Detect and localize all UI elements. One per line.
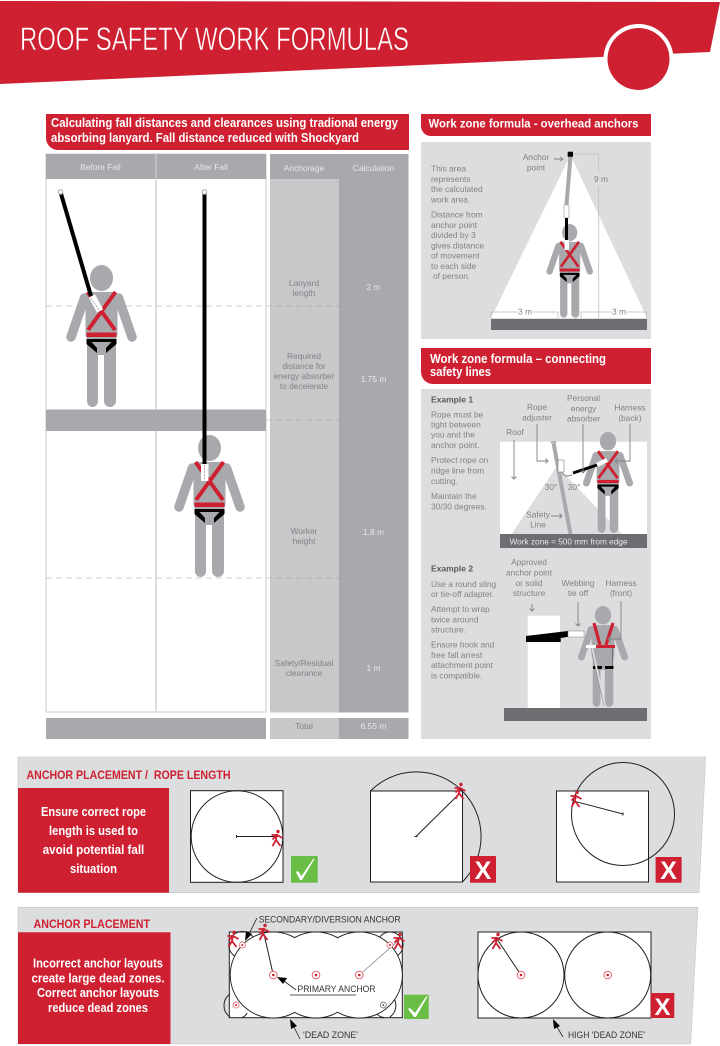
panel: anchor placement / rope length (18, 757, 706, 893)
example 1 text: Rope must be (431, 410, 483, 420)
example 1 labels and arrows: Personal (567, 393, 600, 403)
header circle (604, 24, 674, 94)
example 1 labels and arrows: adjuster (522, 412, 552, 422)
heading: ANCHOR PLACEMENT (34, 917, 151, 931)
label: dead zone: 'DEAD ZONE' (303, 1030, 358, 1041)
example 1 labels and arrows: 30° (568, 482, 580, 492)
table column headings: Calculation (353, 163, 395, 173)
anchorage labels: Required (287, 351, 321, 361)
icon: cross: X (654, 994, 671, 1021)
work area text: represents (431, 174, 471, 184)
example 2 text: Attempt to wrap (431, 604, 490, 614)
example 2 text: is compatible. (431, 670, 482, 680)
work area text: of movement (431, 250, 480, 260)
dimension labels (518, 174, 626, 316)
example 2 labels and arrows: Webbing (562, 578, 595, 588)
icon: check (291, 856, 318, 883)
dimension labels: 3 m (612, 306, 626, 316)
example 2 text: twice around (431, 614, 479, 624)
callout: length is used to (49, 824, 138, 838)
example 1 labels and arrows (506, 393, 646, 530)
icon: cross: X (475, 857, 492, 885)
label: primary anchor: PRIMARY ANCHOR (298, 984, 376, 995)
work area text: divided by 3 (431, 230, 476, 240)
heading: fall distances (46, 114, 409, 150)
work area triangle (491, 155, 647, 318)
example 2 text: Use a round sling (431, 579, 497, 589)
example 1 text: tight between (431, 420, 481, 430)
work zone bar (500, 534, 647, 548)
header banner (0, 1, 720, 94)
table column headings: Anchorage (284, 163, 325, 173)
anchorage labels: Safety/Residual (275, 658, 333, 668)
example 1 labels and arrows: Safety (526, 510, 551, 520)
icon: cross: X (660, 857, 677, 885)
dimension lines (491, 154, 647, 318)
example 2 text: attachment point (431, 660, 494, 670)
example 1 text: Protect rope on (431, 455, 489, 465)
example 1 text: Example 1 (431, 394, 473, 404)
example 2 text: or tie-off adapter. (431, 589, 494, 599)
work area text: This area (431, 164, 466, 174)
diagram: correct rope length (190, 791, 283, 882)
panel: overhead anchors (421, 142, 651, 339)
icon: check (404, 995, 429, 1019)
callout (18, 932, 170, 1044)
work area text: to each side (431, 261, 477, 271)
example 2 text: Ensure hook and (431, 640, 495, 650)
dimension labels: 3 m (518, 306, 532, 316)
ground (491, 319, 647, 330)
example 1 text: cutting. (431, 476, 458, 486)
diagram: rope too long, off-centre (556, 762, 674, 882)
heading: connecting safety lines: safety lines (430, 365, 491, 379)
anchorage labels (274, 278, 335, 731)
example 1 diagram (500, 432, 647, 534)
anchorage labels: height (293, 536, 316, 546)
table column headings: After Fall (194, 162, 228, 172)
example 2 labels and arrows: anchor point (506, 568, 553, 578)
calculation values: 1 m (367, 663, 381, 673)
icon: cross (656, 857, 682, 885)
anchorage labels: distance for (282, 361, 326, 371)
calculation values: 6.55 m (361, 721, 386, 731)
heading: connecting safety lines (421, 348, 651, 384)
label: secondary anchor (245, 915, 401, 941)
example 2 text: free fall arrest (431, 650, 483, 660)
example 2 labels and arrows: tie off (568, 588, 589, 598)
heading: ANCHOR PLACEMENT / ROPE LENGTH (26, 768, 230, 782)
anchorage labels: energy absorber (274, 371, 335, 381)
callout: create large dead zones. (32, 972, 164, 986)
table column headings: Before Fall (80, 162, 121, 172)
example 1 labels and arrows: Rope (527, 402, 547, 412)
example 1 labels and arrows: energy (571, 404, 597, 414)
panel: anchor placement (18, 907, 698, 1044)
example 2 labels and arrows: Harness (605, 578, 637, 588)
dimension labels: 9 m (594, 174, 608, 184)
example 2 labels and arrows: (front) (610, 588, 632, 598)
diagram: incorrect anchor layout (478, 932, 651, 1018)
anchor point label: point (527, 162, 546, 172)
panel: connecting safety lines (421, 389, 651, 739)
example 1 labels and arrows: absorber (567, 414, 600, 424)
label: dead zone (290, 1019, 358, 1041)
calculation values: 2 m (367, 282, 381, 292)
heading: connecting safety lines: Work zone formula – connecting (430, 352, 606, 366)
callout: Ensure correct rope (41, 805, 146, 819)
example 2 labels and arrows (506, 557, 637, 642)
example 1 text: you and the (431, 430, 475, 440)
example 1 text: Maintain the (431, 491, 477, 501)
icon: cross (470, 856, 496, 885)
title: ROOF SAFETY WORK FORMULAS (20, 21, 409, 57)
work area text: Distance from (431, 210, 483, 220)
example 1 text: ridge line from (431, 466, 484, 476)
table columns background (46, 154, 408, 739)
example 2 text: structure. (431, 624, 466, 634)
example 2 text (431, 564, 497, 680)
anchorage labels: to decelerate (280, 381, 329, 391)
figure: after fall (179, 190, 240, 577)
work area text (430, 164, 484, 281)
fall clearance table (46, 154, 408, 739)
work zone bar: Work zone = 500 mm from edge (510, 536, 628, 546)
example 1 labels and arrows: Line (530, 520, 546, 530)
anchorage labels: Lanyard (289, 278, 319, 288)
example 1 labels and arrows: Harness (614, 402, 646, 412)
callout: avoid potential fall (43, 843, 144, 857)
work area text: gives distance (431, 240, 484, 250)
example 1 text: 30/30 degrees. (431, 502, 487, 512)
anchorage labels: Worker (291, 526, 318, 536)
label: high dead zone: HIGH 'DEAD ZONE' (568, 1030, 645, 1041)
example 2 labels and arrows: or solid (516, 578, 543, 588)
anchorage labels: clearance (286, 668, 322, 678)
example 1 text (431, 394, 489, 512)
example 2 diagram (504, 606, 647, 721)
calculation values (361, 282, 386, 731)
heading: overhead anchors: Work zone formula - overhead anchors (428, 116, 639, 130)
label: primary anchor (277, 977, 376, 995)
example 1 text: anchor point. (431, 440, 479, 450)
calculation values: 1.8 m (363, 527, 384, 537)
heading: fall distances: absorbing lanyard. Fall distance reduced with Shockyard (51, 131, 359, 145)
example 2 text: Example 2 (431, 564, 473, 574)
icon: cross (651, 993, 674, 1021)
anchorage labels: length (293, 288, 316, 298)
callout (18, 788, 169, 893)
work area text: anchor point (431, 220, 478, 230)
example 2 labels and arrows: Approved (511, 557, 547, 567)
callout: Incorrect anchor layouts (33, 957, 163, 971)
heading: overhead anchors (421, 114, 651, 136)
anchor point label (523, 152, 563, 172)
label: secondary anchor: SECONDARY/DIVERSION ANCHOR (259, 915, 401, 926)
work area text: work area. (430, 194, 470, 204)
example 1 labels and arrows: (back) (618, 413, 642, 423)
label: high dead zone (553, 1019, 645, 1041)
anchorage labels: Total (295, 721, 313, 731)
figure with overhead lanyard (550, 152, 590, 318)
figure: before fall (58, 190, 132, 407)
anchor point label: Anchor (523, 152, 549, 162)
callout: reduce dead zones (48, 1001, 148, 1015)
work area text: of person. (433, 271, 470, 281)
diagram: correct anchor layout (224, 924, 404, 1018)
example 2 labels and arrows: structure (513, 588, 546, 598)
callout: Correct anchor layouts (37, 986, 159, 1000)
diagram: rope too long, corner (370, 772, 481, 882)
callout: situation (70, 862, 117, 876)
table column headings (80, 162, 395, 173)
work area text: the calculated (431, 184, 483, 194)
heading: fall distances: Calculating fall distances and clearances using tradional energy (51, 116, 398, 130)
example 1 labels and arrows: Roof (506, 427, 525, 437)
example 1 labels and arrows: 30° (545, 482, 557, 492)
calculation values: 1.75 m (361, 374, 386, 384)
